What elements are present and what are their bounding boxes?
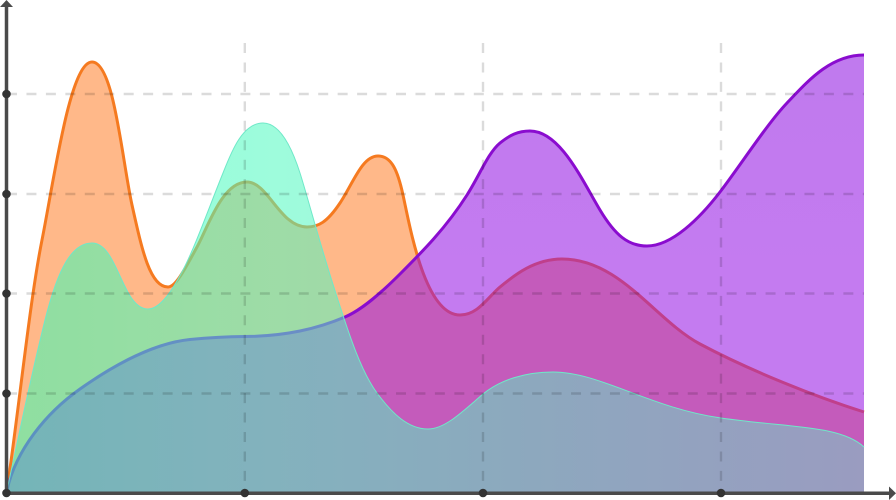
series: teal area (7, 123, 864, 492)
axis tick markers (2, 90, 725, 497)
y axis (0, 0, 13, 493)
x axis (6, 486, 896, 500)
